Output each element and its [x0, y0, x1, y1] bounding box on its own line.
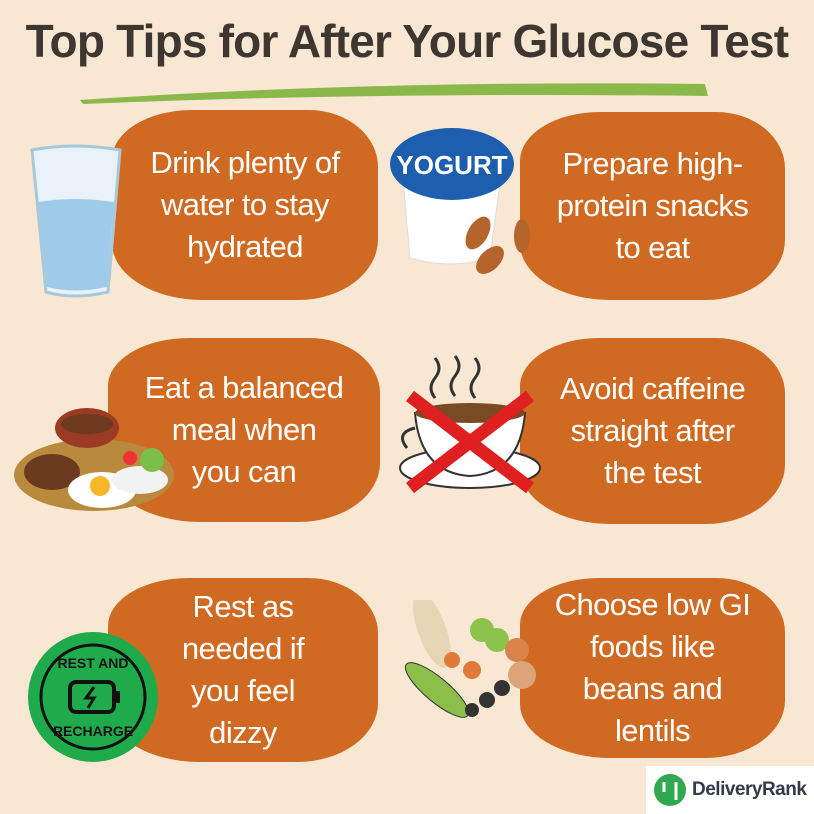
panel: avoid caffeine: straight after	[571, 413, 734, 448]
title: Top Tips for After Your Glucose Test	[26, 15, 788, 67]
logo: DeliveryRank	[646, 766, 814, 814]
icon: crossed coffee cup	[399, 355, 541, 494]
green brush underline	[80, 83, 708, 104]
panel: protein snacks	[520, 112, 785, 300]
panel: drink water: Drink plenty of	[150, 145, 340, 180]
panel: low GI foods: lentils	[615, 713, 690, 748]
panel: protein snacks: to eat	[616, 230, 689, 265]
icon: yogurt	[390, 128, 530, 274]
icon: yogurt: YOGURT	[396, 150, 508, 180]
icon: rest and recharge badge: RECHARGE	[53, 723, 133, 739]
panel: drink water	[112, 110, 378, 300]
icon: rest and recharge badge: REST AND	[57, 655, 129, 671]
panel: rest: Rest as	[193, 589, 293, 624]
panel: balanced meal	[108, 338, 380, 522]
panel: avoid caffeine: Avoid caffeine	[560, 371, 745, 406]
panel: rest	[108, 578, 378, 762]
panel: rest: dizzy	[209, 715, 277, 750]
panel: drink water: hydrated	[187, 229, 303, 264]
icon: water glass	[30, 144, 122, 298]
icon: meal plate	[14, 408, 174, 511]
panel: avoid caffeine: the test	[604, 455, 701, 490]
logo: DeliveryRank: DeliveryRank	[692, 779, 806, 800]
panel: avoid caffeine	[520, 338, 785, 524]
panel: protein snacks: protein snacks	[557, 188, 748, 223]
panel: low GI foods: beans and	[583, 671, 722, 706]
panel: low GI foods: Choose low GI	[555, 587, 750, 622]
icon: rest and recharge badge	[28, 632, 158, 762]
panel: drink water: water to stay	[161, 187, 329, 222]
panel: rest: needed if	[182, 631, 304, 666]
panel: balanced meal: you can	[192, 454, 296, 489]
panel: balanced meal: meal when	[172, 412, 316, 447]
panel: low GI foods	[520, 578, 785, 758]
icon: beans	[404, 600, 536, 718]
panel: low GI foods: foods like	[590, 629, 715, 664]
panel: rest: you feel	[191, 673, 295, 708]
panel: balanced meal: Eat a balanced	[145, 370, 343, 405]
panel: protein snacks: Prepare high-	[562, 146, 743, 181]
